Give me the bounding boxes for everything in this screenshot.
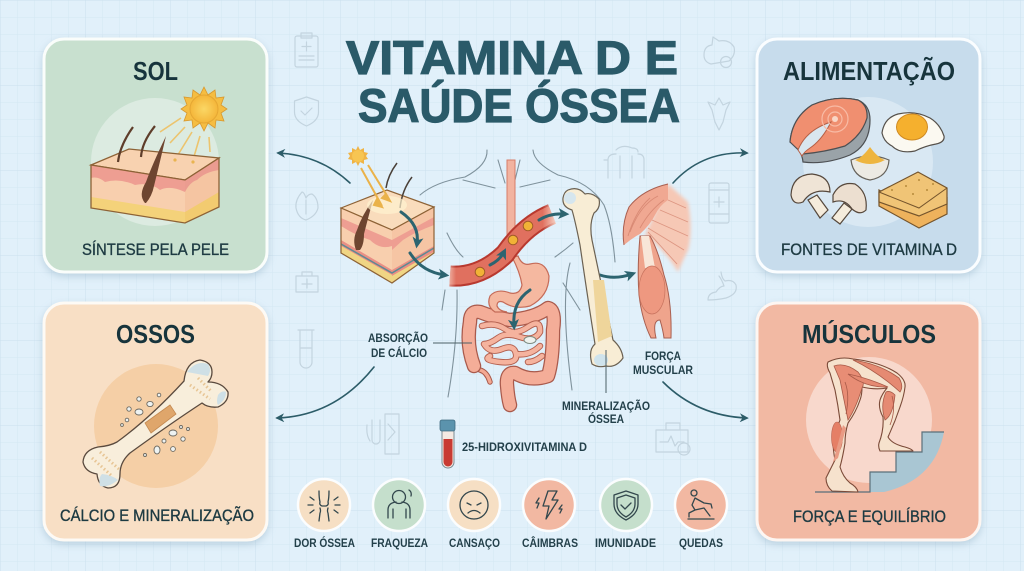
symptom: câimbras	[522, 479, 578, 550]
arrow: to alimentação panel	[673, 153, 747, 183]
heading: ossos: OSSOS	[116, 319, 195, 349]
arrow: to ossos panel	[277, 367, 374, 418]
symptom: cansaço: CANSAÇO	[449, 536, 500, 550]
faint background icons	[294, 33, 736, 455]
esophagus	[507, 160, 515, 236]
skin cube	[341, 163, 434, 283]
panel: músculos	[757, 303, 980, 540]
symptom: câimbras: CÂIMBRAS	[522, 535, 578, 550]
label: mineralização óssea	[562, 350, 650, 426]
femur	[563, 189, 623, 367]
heading: alimentação: ALIMENTAÇÃO	[783, 56, 955, 86]
symptom: dor óssea: DOR ÓSSEA	[294, 535, 355, 550]
small sun	[348, 146, 368, 166]
blood test tube with label	[440, 420, 587, 468]
arm muscle	[623, 184, 690, 338]
label: 25-hidroxivitamina d: 25-HIDROXIVITAMINA D	[462, 440, 587, 454]
heading: sol: SOL	[133, 56, 178, 86]
label: força muscular	[633, 349, 693, 377]
title	[346, 31, 680, 132]
symptom: cansaço	[448, 479, 500, 550]
icon: fortified bread	[879, 172, 947, 228]
panel: sol	[44, 39, 267, 272]
flow arrows	[401, 212, 632, 326]
arrow: to sol panel	[278, 153, 350, 183]
label: absorção de cálcio: DE CÁLCIO	[371, 345, 427, 360]
blood vessel	[450, 214, 552, 277]
symptom: imunidade	[595, 479, 656, 550]
symptom: imunidade: IMUNIDADE	[595, 536, 656, 550]
icon: salmon	[790, 98, 870, 163]
panel: ossos	[44, 303, 267, 540]
label: força muscular: MUSCULAR	[633, 363, 693, 377]
icon: test tube	[440, 420, 455, 468]
caption: fontes de vitamina d: FONTES DE VITAMINA D	[781, 240, 957, 259]
body outline	[420, 150, 615, 397]
symptom: quedas	[675, 479, 727, 550]
small intestine	[482, 323, 542, 362]
caption: cálcio e mineralização: CÁLCIO E MINERALIZAÇÃO	[60, 506, 254, 525]
label: absorção de cálcio	[368, 330, 472, 360]
icon: fried egg	[882, 113, 944, 152]
symptom icons row	[294, 479, 727, 550]
calcium particle	[524, 336, 536, 344]
panel: alimentação	[757, 39, 980, 272]
arrow: to músculos panel	[663, 382, 747, 418]
icon: mushrooms	[791, 174, 866, 224]
stomach	[489, 256, 549, 312]
label: força muscular: FORÇA	[645, 349, 681, 363]
symptom: fraqueza: FRAQUEZA	[371, 536, 428, 550]
caption: síntese pela pele: SÍNTESE PELA PELE	[82, 240, 229, 259]
label: mineralização óssea: ÓSSEA	[588, 411, 624, 426]
large intestine	[469, 308, 554, 405]
illustration: legs climbing stairs	[806, 357, 944, 492]
caption: força e equilíbrio: FORÇA E EQUILÍBRIO	[793, 507, 946, 526]
symptom: dor óssea	[294, 479, 355, 550]
central diagram: body	[341, 146, 693, 426]
sun rays into skin	[361, 165, 390, 207]
title: VITAMINA D E	[346, 31, 678, 84]
title: SAÚDE ÓSSEA	[358, 79, 680, 132]
heading: músculos: MÚSCULOS	[802, 319, 936, 349]
illustration: foods	[790, 97, 947, 228]
illustration: sun and skin	[91, 87, 227, 226]
icon: bowl	[851, 147, 889, 180]
illustration: bone with calcium	[83, 360, 228, 488]
label: absorção de cálcio: ABSORÇÃO	[368, 330, 428, 345]
symptom: quedas: QUEDAS	[679, 536, 723, 550]
label: mineralização óssea: MINERALIZAÇÃO	[562, 398, 650, 413]
symptom: fraqueza	[371, 479, 428, 550]
